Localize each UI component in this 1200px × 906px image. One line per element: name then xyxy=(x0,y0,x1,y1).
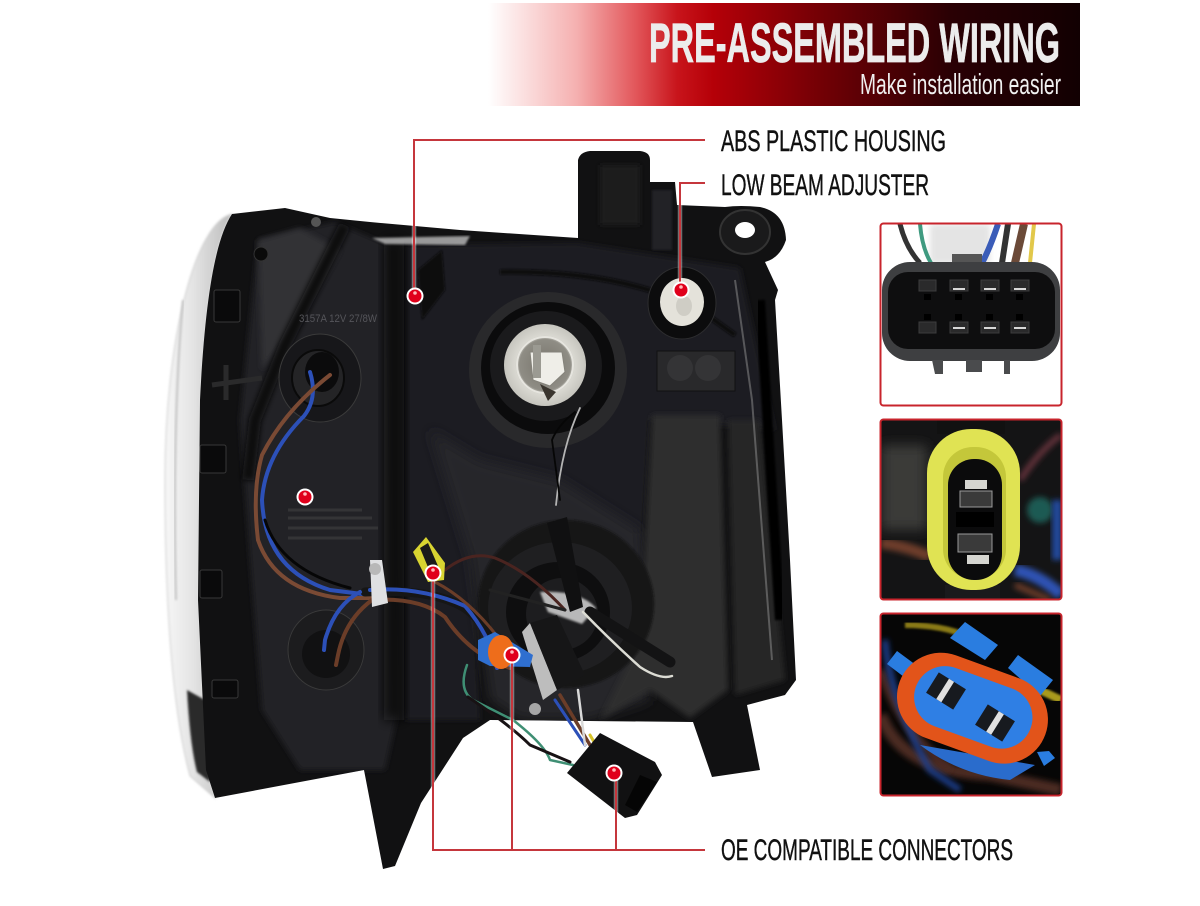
callout: abs plastic housing: ABS PLASTIC HOUSING xyxy=(721,125,946,158)
top glint xyxy=(372,236,470,245)
yellow seal xyxy=(927,429,1020,590)
arched rib xyxy=(500,272,735,335)
centre panel xyxy=(405,243,775,720)
housing silhouette xyxy=(198,151,796,869)
right block xyxy=(600,415,728,720)
wiring xyxy=(256,372,672,765)
blue tabs xyxy=(950,622,998,660)
bottom connector xyxy=(567,733,662,818)
panel: eight-pin connector xyxy=(880,224,1062,406)
emboss rectangle xyxy=(657,351,735,391)
header banner xyxy=(488,3,1080,106)
left inner panel xyxy=(240,222,396,770)
blurred background xyxy=(881,445,927,530)
terminals xyxy=(919,280,1029,333)
callout: oe compatible connectors: OE COMPATIBLE CONNECTORS xyxy=(721,834,1013,867)
adjuster knob xyxy=(648,267,716,339)
embossed label block xyxy=(288,510,378,538)
headlight housing xyxy=(165,151,796,869)
panel: blue and orange connector xyxy=(880,614,1062,796)
top rim screw xyxy=(311,217,321,227)
mounting lug xyxy=(720,210,770,254)
callout: low beam adjuster: LOW BEAM ADJUSTER xyxy=(721,169,929,202)
callout: abs plastic housing xyxy=(406,125,946,304)
lower bulb socket xyxy=(478,520,654,688)
blue connector xyxy=(478,632,533,669)
terminals xyxy=(965,480,987,489)
connector body xyxy=(882,262,1060,361)
white clamp xyxy=(369,560,388,607)
main bulb socket xyxy=(469,292,627,448)
orange seal xyxy=(897,652,1048,764)
callout: oe compatible connectors xyxy=(424,564,1013,867)
centre rib xyxy=(384,240,404,720)
small screw xyxy=(254,247,268,261)
callout: low beam adjuster xyxy=(672,169,929,298)
terminal slots xyxy=(926,672,1015,742)
rim clips xyxy=(200,290,240,698)
lower left bulb socket xyxy=(288,610,364,690)
tower xyxy=(602,168,638,222)
lens xyxy=(165,214,232,798)
blue insert xyxy=(914,666,1032,749)
embossed text: 3157A 12V 27/8W xyxy=(299,313,378,325)
plug: in-line black connector xyxy=(547,517,583,612)
yellow connector xyxy=(413,537,445,582)
subtitle: Make installation easier xyxy=(860,69,1061,101)
marker: housing body xyxy=(296,488,314,506)
upper left bulb socket xyxy=(279,334,361,422)
control module xyxy=(522,615,585,715)
panel: yellow connector xyxy=(880,420,1062,600)
zip tie on rim xyxy=(212,365,262,400)
